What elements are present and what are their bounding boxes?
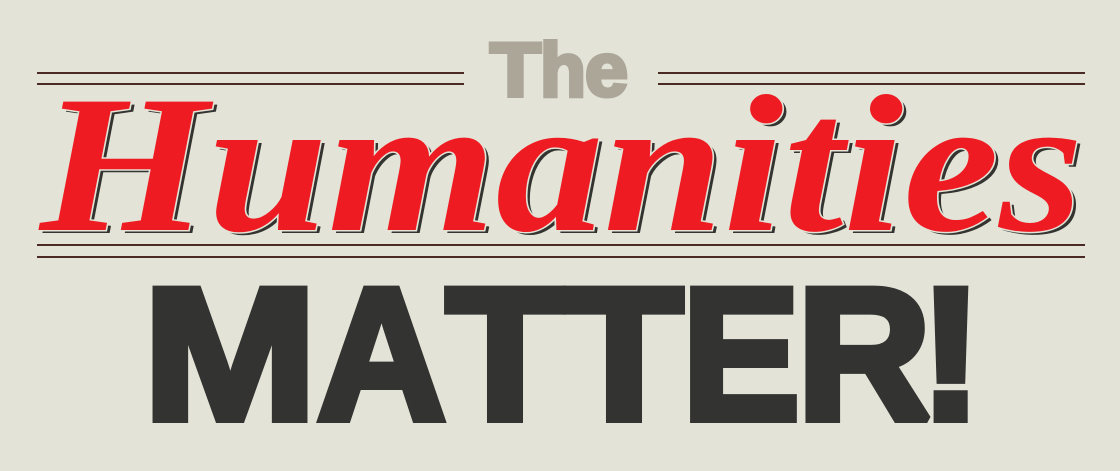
- heading: The: e: [585, 28, 628, 113]
- heading: MATTER!: [143, 249, 982, 459]
- heading: MATTER!: !: [920, 249, 982, 459]
- heading: MATTER!: E: [682, 249, 800, 459]
- heading: Humanities: Humanities: [38, 56, 1083, 273]
- heading: MATTER!: R: [797, 249, 931, 459]
- heading: The: T: [490, 28, 541, 113]
- heading: The: [490, 28, 628, 113]
- heading: MATTER!: T: [565, 249, 683, 459]
- heading: Humanities: Humanities: [42, 59, 1087, 276]
- heading: MATTER!: T: [446, 249, 564, 459]
- heading: The: h: [540, 28, 586, 113]
- heading: MATTER!: M: [143, 249, 317, 459]
- heading: MATTER!: A: [317, 249, 446, 459]
